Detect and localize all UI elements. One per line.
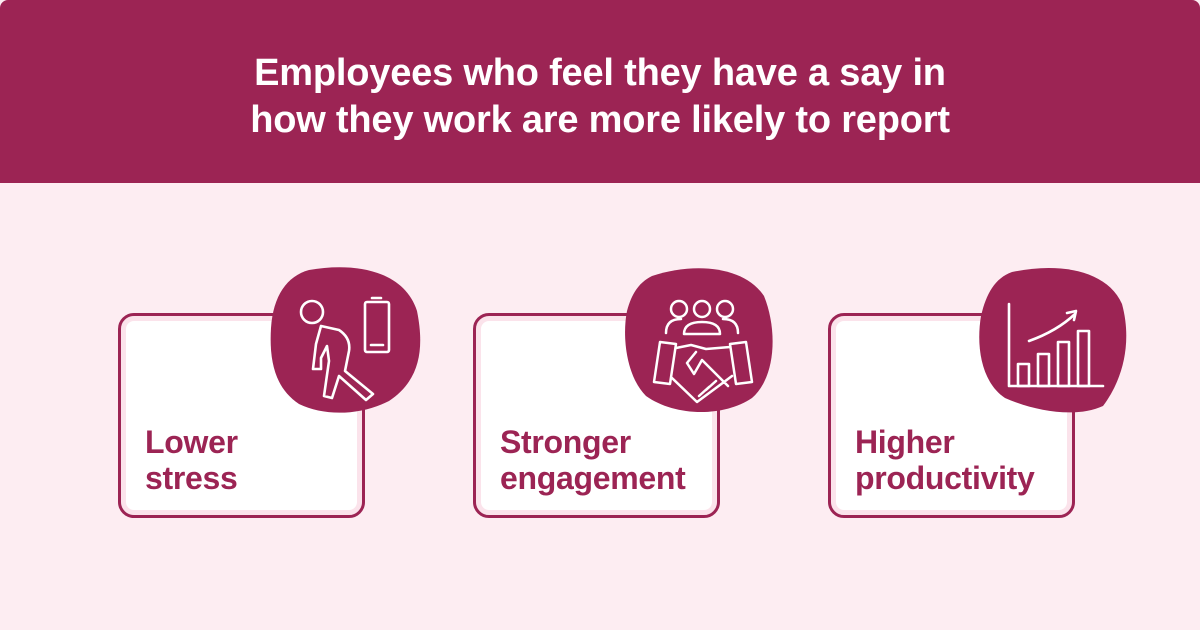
card: stronger engagement: engagement [500, 460, 686, 496]
card: lower stress: stress [145, 460, 238, 496]
card: lower stress [118, 313, 365, 518]
card: higher productivity: productivity [855, 460, 1035, 496]
icon: growth bar chart [979, 268, 1126, 412]
title: Employees who feel they have a say in [254, 52, 946, 94]
icon: tired person with low battery [270, 267, 420, 413]
card: stronger engagement: Stronger [500, 424, 631, 460]
card: stronger engagement [473, 313, 720, 518]
title: how they work are more likely to report [250, 99, 950, 141]
card: lower stress: Lower [145, 424, 238, 460]
icon: team handshake [625, 268, 773, 412]
header banner [0, 0, 1200, 183]
card: higher productivity: Higher [855, 424, 955, 460]
card: higher productivity [828, 313, 1075, 518]
title [250, 52, 950, 141]
